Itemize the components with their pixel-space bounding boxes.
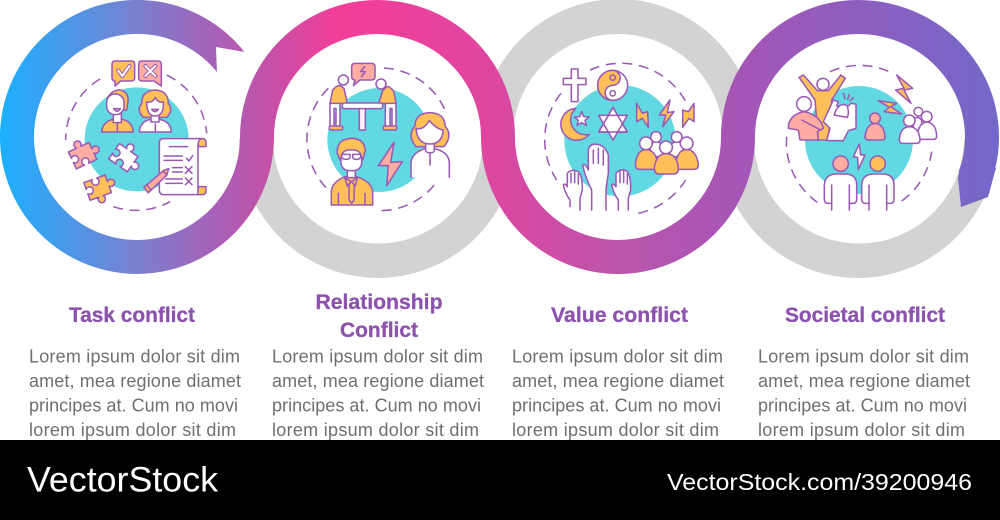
text block: societal conflict [758,346,970,440]
icon: task conflict [66,61,207,210]
panel: relationship conflict [272,63,484,440]
text block: relationship conflict [272,346,484,440]
text block: value conflict [512,346,724,440]
footer bar [0,440,1000,520]
text block: societal conflict: Lorem ipsum dolor sit dim [758,346,969,366]
heading: value conflict: Value conflict [551,304,688,327]
heading: relationship conflict: Conflict [340,319,418,342]
icon: societal conflict [786,65,937,210]
panel: task conflict [29,61,241,440]
text block: value conflict: Lorem ipsum dolor sit dim [512,346,723,366]
text block: task conflict: principes at. Cum no movi [29,396,238,416]
panel: societal conflict [758,65,970,440]
heading: relationship conflict: Relationship [316,291,442,314]
icon: relationship conflict [307,63,449,211]
gradient ribbon [17,17,996,257]
text block: task conflict: Lorem ipsum dolor sit dim [29,346,240,366]
grey rings [257,17,979,260]
footer logo text: VectorStock [27,460,219,500]
text block: value conflict: principes at. Cum no movi [512,396,721,416]
panel: value conflict [512,63,724,440]
text block: societal conflict: principes at. Cum no movi [758,396,967,416]
text block: task conflict: amet, mea regione diamet [29,371,241,391]
text block: task conflict: lorem ipsum dolor sit dim [29,420,236,440]
text block: relationship conflict: principes at. Cum no movi [272,396,481,416]
text block: relationship conflict: amet, mea regione diamet [272,371,484,391]
icon: value conflict [545,63,698,213]
text block: societal conflict: amet, mea regione diamet [758,371,970,391]
text block: value conflict: lorem ipsum dolor sit dim [512,420,719,440]
text block: relationship conflict: lorem ipsum dolor sit dim [272,420,479,440]
footer image id: VectorStock.com/39200946 [667,469,972,495]
heading: societal conflict: Societal conflict [785,304,945,327]
heading: task conflict: Task conflict [69,304,195,327]
text block: value conflict: amet, mea regione diamet [512,371,724,391]
white discs [273,34,964,244]
heading: relationship conflict [316,291,442,342]
text block: task conflict [29,346,241,440]
text block: relationship conflict: Lorem ipsum dolor sit dim [272,346,483,366]
text block: societal conflict: lorem ipsum dolor sit dim [758,420,965,440]
